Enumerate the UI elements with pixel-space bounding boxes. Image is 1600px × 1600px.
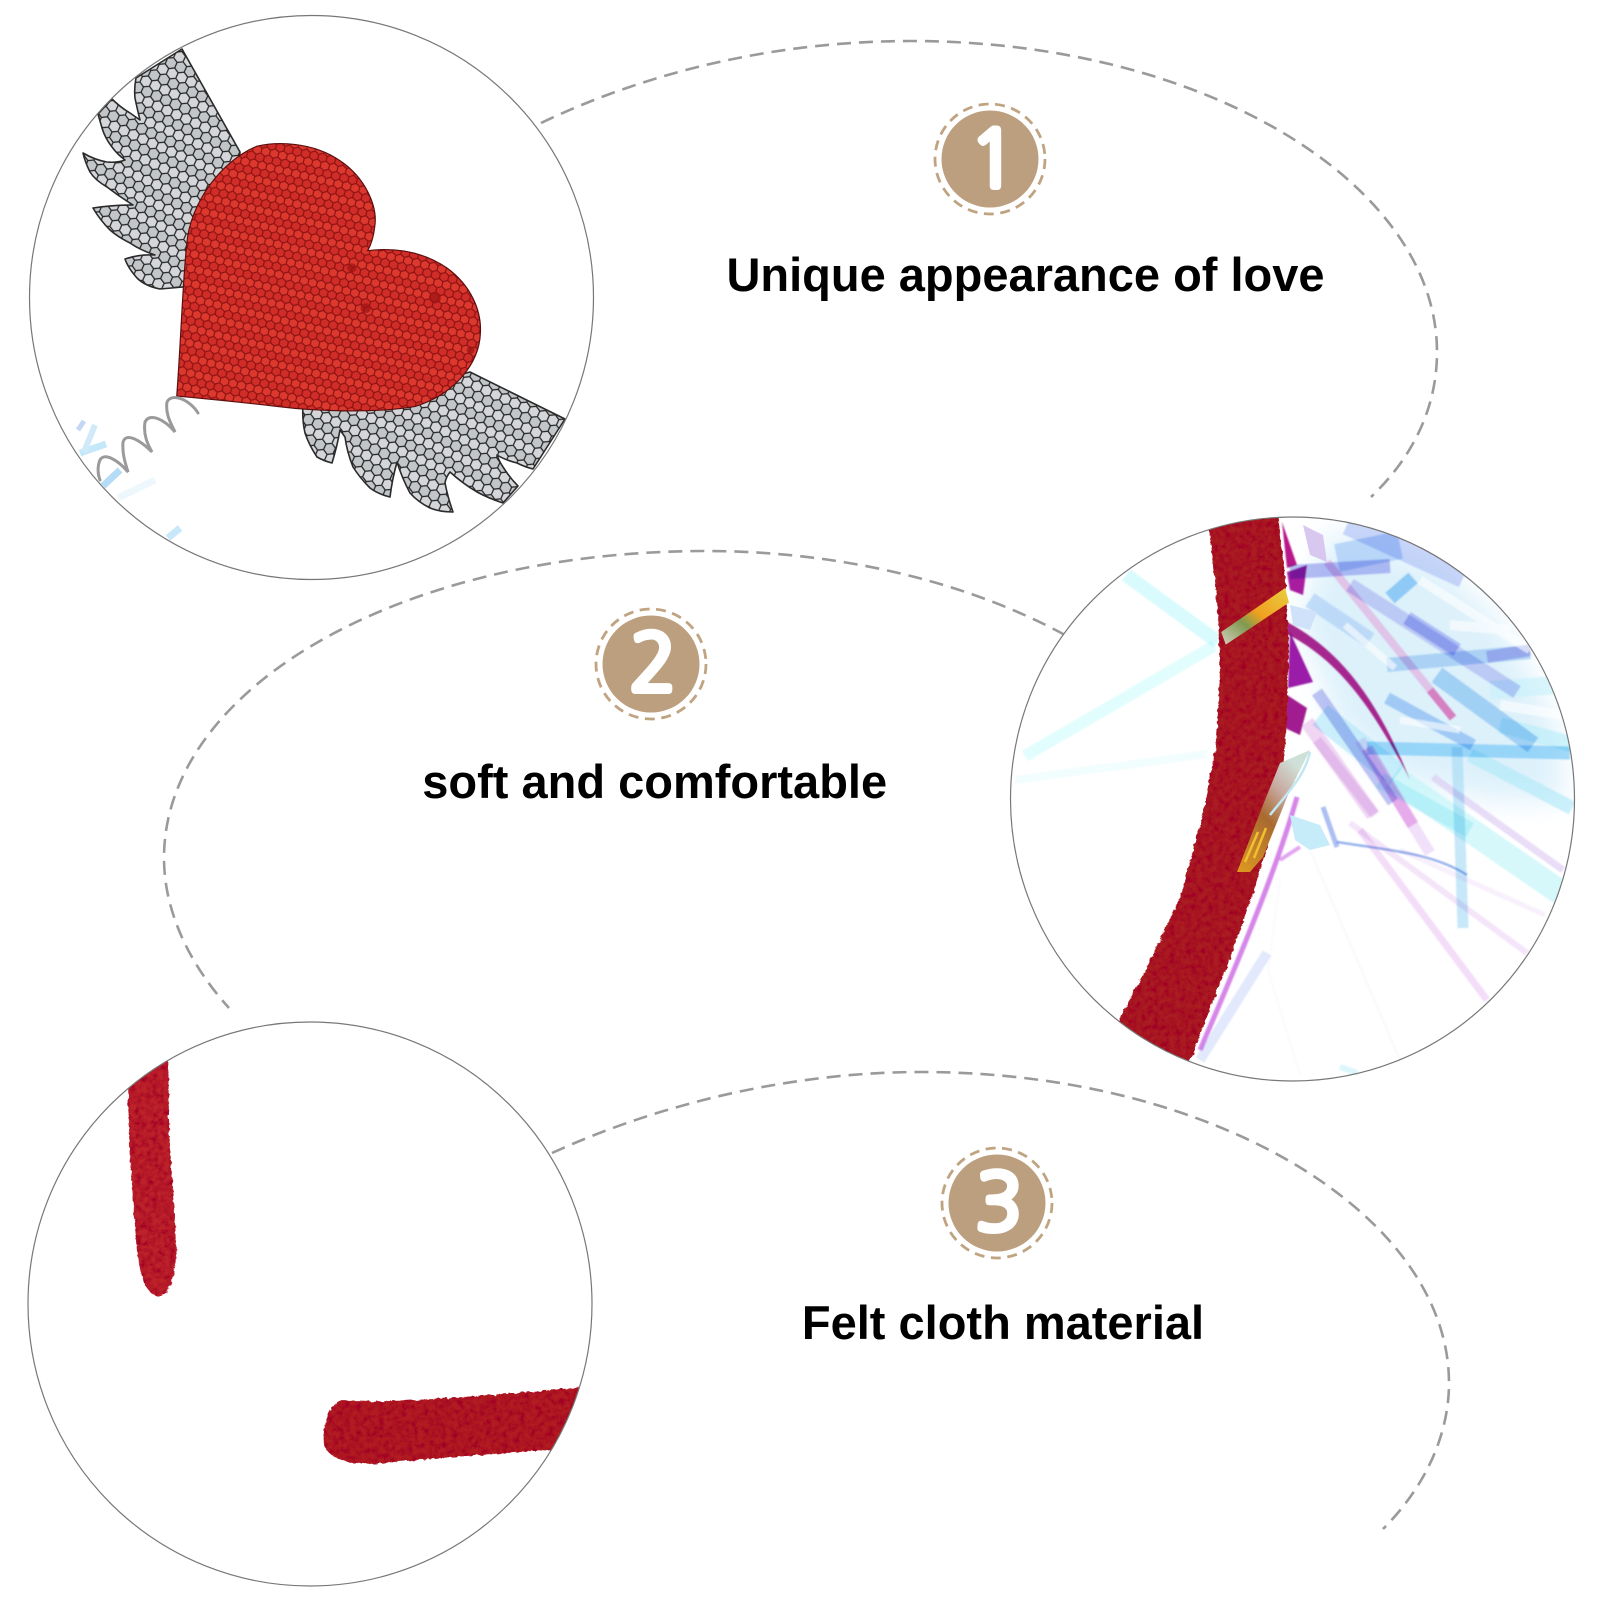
metal spring: [98, 398, 198, 480]
number badge 3: [942, 1148, 1052, 1258]
dashed connector: feature 1: [541, 41, 1437, 497]
crumpled foil pieces: [1290, 525, 1330, 850]
felt band end, upper: [127, 1050, 176, 1297]
felt band end, lower: [324, 1387, 593, 1464]
red heart: [177, 144, 480, 411]
number badge 3: 3: [975, 1164, 1023, 1242]
number badge 2: 2: [629, 625, 677, 703]
heading: feature 2: soft and comfortable: [422, 755, 887, 808]
lower wing: [303, 372, 565, 512]
photo circle: felt band ends: [28, 1022, 593, 1586]
upper wing: [83, 49, 240, 289]
heart dark spots: [347, 263, 474, 354]
number badge 2: [596, 609, 706, 719]
number badge 1: [935, 104, 1045, 214]
red felt band: [1115, 511, 1289, 1066]
dashed connector: feature 2: [164, 551, 1065, 1008]
photo circle: felt band with iridescent tinsel: [1010, 511, 1575, 1081]
photo circle: heart with wings: [30, 16, 594, 580]
faint iridescent strips: [78, 421, 180, 538]
gold tinsel strip lower: [1237, 750, 1310, 872]
dashed connector: feature 3: [552, 1072, 1449, 1529]
tinsel strips: [1015, 522, 1575, 1075]
number badge 1: 1: [969, 121, 1017, 199]
white glints between strips: [1345, 580, 1570, 730]
gold tinsel strip upper: [1221, 588, 1289, 645]
heading: feature 1: Unique appearance of love: [726, 248, 1325, 301]
pale tinsel wash: [1300, 530, 1565, 800]
heading: feature 3: Felt cloth material: [802, 1296, 1204, 1349]
